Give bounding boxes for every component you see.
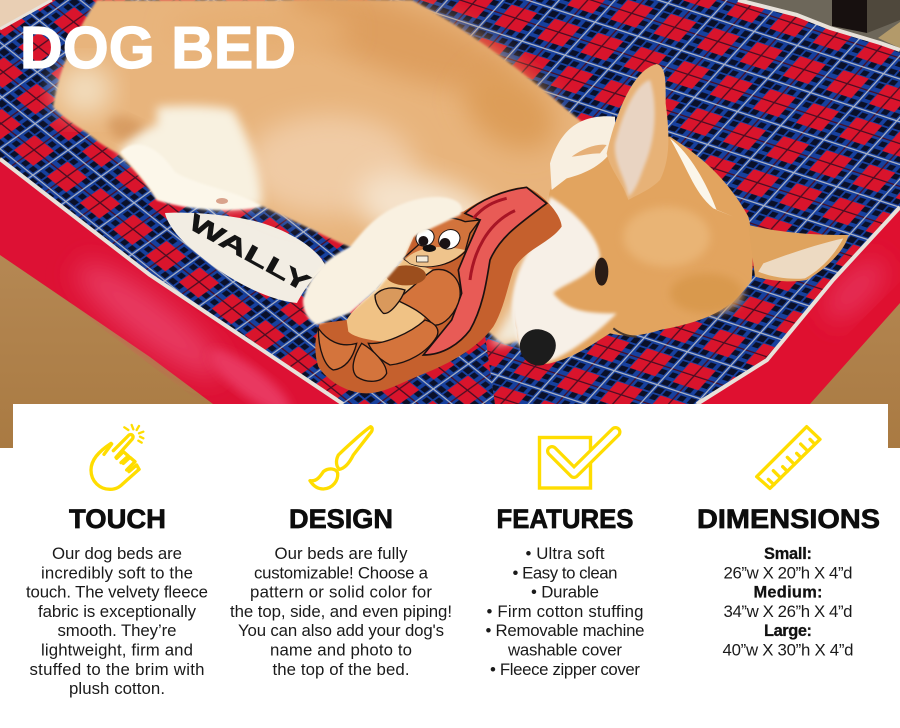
- toy acorn: [386, 265, 426, 285]
- text: dimensions list: Small:: [764, 545, 812, 563]
- upright ear: [607, 64, 668, 200]
- text: features list: • Easy to clean: [512, 563, 618, 582]
- text: design description: Our beds are fully: [274, 544, 408, 563]
- text: touch description: smooth. They’re: [58, 621, 176, 640]
- text: touch description: incredibly soft to the: [41, 563, 193, 582]
- text: touch description: Our dog beds are: [52, 544, 182, 563]
- text: dimensions list: 26”w X 20”h X 4”d: [724, 563, 852, 582]
- icon: ruler: [757, 427, 820, 488]
- text: design description: pattern or solid color for: [250, 583, 432, 602]
- toy face: [403, 218, 480, 267]
- nose: [520, 329, 556, 366]
- text: design description: the top of the bed.: [272, 660, 410, 679]
- toy belly: [347, 260, 437, 342]
- dog body: [53, 0, 640, 345]
- text: touch description: plush cotton.: [69, 679, 165, 698]
- text: dimensions list: Large:: [764, 622, 812, 640]
- text: touch description: fabric is exceptionally: [38, 602, 197, 621]
- dog front leg and paw: [303, 197, 462, 325]
- side ear: [748, 225, 848, 281]
- white neck patch: [550, 116, 615, 190]
- top-left corner blanket: [0, 0, 49, 28]
- text: design description: You can also add your dog's: [238, 621, 444, 640]
- dog neck fur beside toy: [485, 294, 520, 352]
- heading: touch: TOUCH: [69, 504, 166, 534]
- text: features list: [486, 544, 644, 679]
- heading: dimensions: DIMENSIONS: [697, 504, 880, 534]
- heading: features: FEATURES: [496, 504, 634, 534]
- text: dimensions list: 40”w X 30”h X 4”d: [722, 640, 854, 660]
- title: DOG BED: [20, 15, 296, 81]
- icon: paint brush: [310, 427, 372, 489]
- dog hind legs and belly: [118, 106, 262, 210]
- toy haunches: [318, 269, 460, 381]
- text: touch description: [26, 544, 208, 698]
- text: dimensions list: 34”w X 26”h X 4”d: [724, 602, 852, 621]
- text: touch description: lightweight, firm and: [41, 640, 193, 660]
- column: touch: [26, 425, 208, 698]
- text: design description: name and photo to: [270, 640, 412, 660]
- column: design: [230, 427, 452, 679]
- plaid bed top: [0, 0, 900, 404]
- white content panel: [0, 404, 900, 728]
- text: touch description: stuffed to the brim with: [30, 660, 204, 679]
- text: dimensions list: Medium:: [754, 584, 822, 602]
- text: features list: • Fleece zipper cover: [490, 660, 640, 679]
- white blaze: [670, 138, 733, 217]
- closed eye: [595, 258, 608, 286]
- carpet floor: [0, 157, 900, 448]
- icon: checkbox: [540, 432, 616, 488]
- column: dimensions: [697, 427, 880, 660]
- text: features list: washable cover: [507, 640, 622, 660]
- bed piping: [0, 0, 900, 404]
- text: touch description: touch. The velvety fleece: [26, 583, 208, 602]
- squirrel toy: [315, 187, 562, 393]
- column: features: [486, 432, 644, 679]
- top-right furniture: [746, 0, 900, 48]
- toy tail: [423, 187, 547, 355]
- text: dimensions list: [722, 545, 854, 660]
- photo: corgi on plaid dog bed: [0, 0, 900, 448]
- dog head: [512, 64, 848, 366]
- text: design description: the top, side, and even piping!: [230, 602, 452, 621]
- text: features list: • Removable machine: [486, 621, 644, 640]
- heading: design: DESIGN: [289, 504, 393, 534]
- text: design description: [230, 544, 452, 679]
- text: features list: • Durable: [531, 583, 599, 602]
- text: design description: customizable! Choose a: [254, 563, 429, 582]
- icon: tapping hand: [91, 425, 143, 489]
- name patch with WALLY: [165, 209, 325, 303]
- text: features list: • Ultra soft: [526, 544, 605, 563]
- text: features list: • Firm cotton stuffing: [486, 602, 644, 621]
- red bed side: right: [695, 205, 900, 404]
- name patch with WALLY: WALLY: [184, 209, 315, 298]
- white muzzle: [512, 197, 617, 361]
- red bed side: left: [0, 160, 345, 423]
- mouth line: [613, 328, 637, 337]
